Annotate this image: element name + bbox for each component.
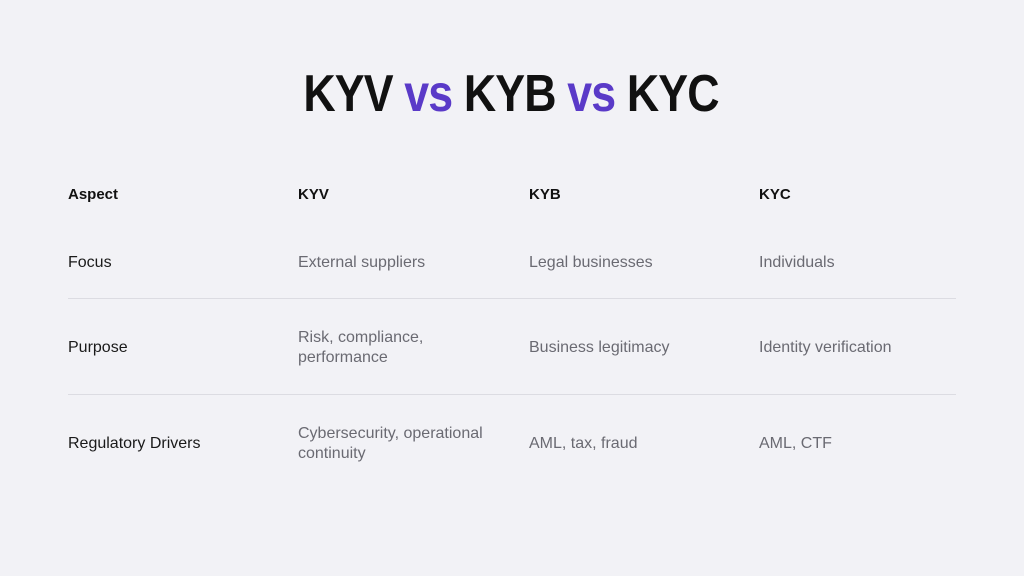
row: regulatory drivers: AML, tax, fraud bbox=[529, 435, 638, 452]
title: KYV vs KYB vs KYC bbox=[303, 65, 719, 123]
row: purpose: Purpose bbox=[68, 339, 128, 356]
table header: Aspect bbox=[68, 186, 118, 203]
row: purpose: Business legitimacy bbox=[529, 339, 670, 356]
row: regulatory drivers: Regulatory Drivers bbox=[68, 435, 200, 452]
row: focus: Focus bbox=[68, 254, 112, 271]
row: regulatory drivers bbox=[68, 425, 832, 462]
row: focus bbox=[68, 254, 835, 271]
row: purpose: performance bbox=[298, 349, 388, 366]
row: focus: Legal businesses bbox=[529, 254, 653, 271]
table header bbox=[68, 186, 791, 203]
row: focus: Individuals bbox=[759, 254, 835, 271]
row: purpose: Identity verification bbox=[759, 339, 892, 356]
table header: KYV bbox=[298, 186, 329, 203]
row: regulatory drivers: continuity bbox=[298, 445, 366, 462]
table header: KYC bbox=[759, 186, 791, 203]
row: focus: External suppliers bbox=[298, 254, 425, 271]
row: purpose bbox=[68, 329, 892, 366]
row: regulatory drivers: AML, CTF bbox=[759, 435, 832, 452]
row: regulatory drivers: Cybersecurity, operational bbox=[298, 425, 483, 442]
row: purpose: Risk, compliance, bbox=[298, 329, 423, 346]
table header: KYB bbox=[529, 186, 561, 203]
